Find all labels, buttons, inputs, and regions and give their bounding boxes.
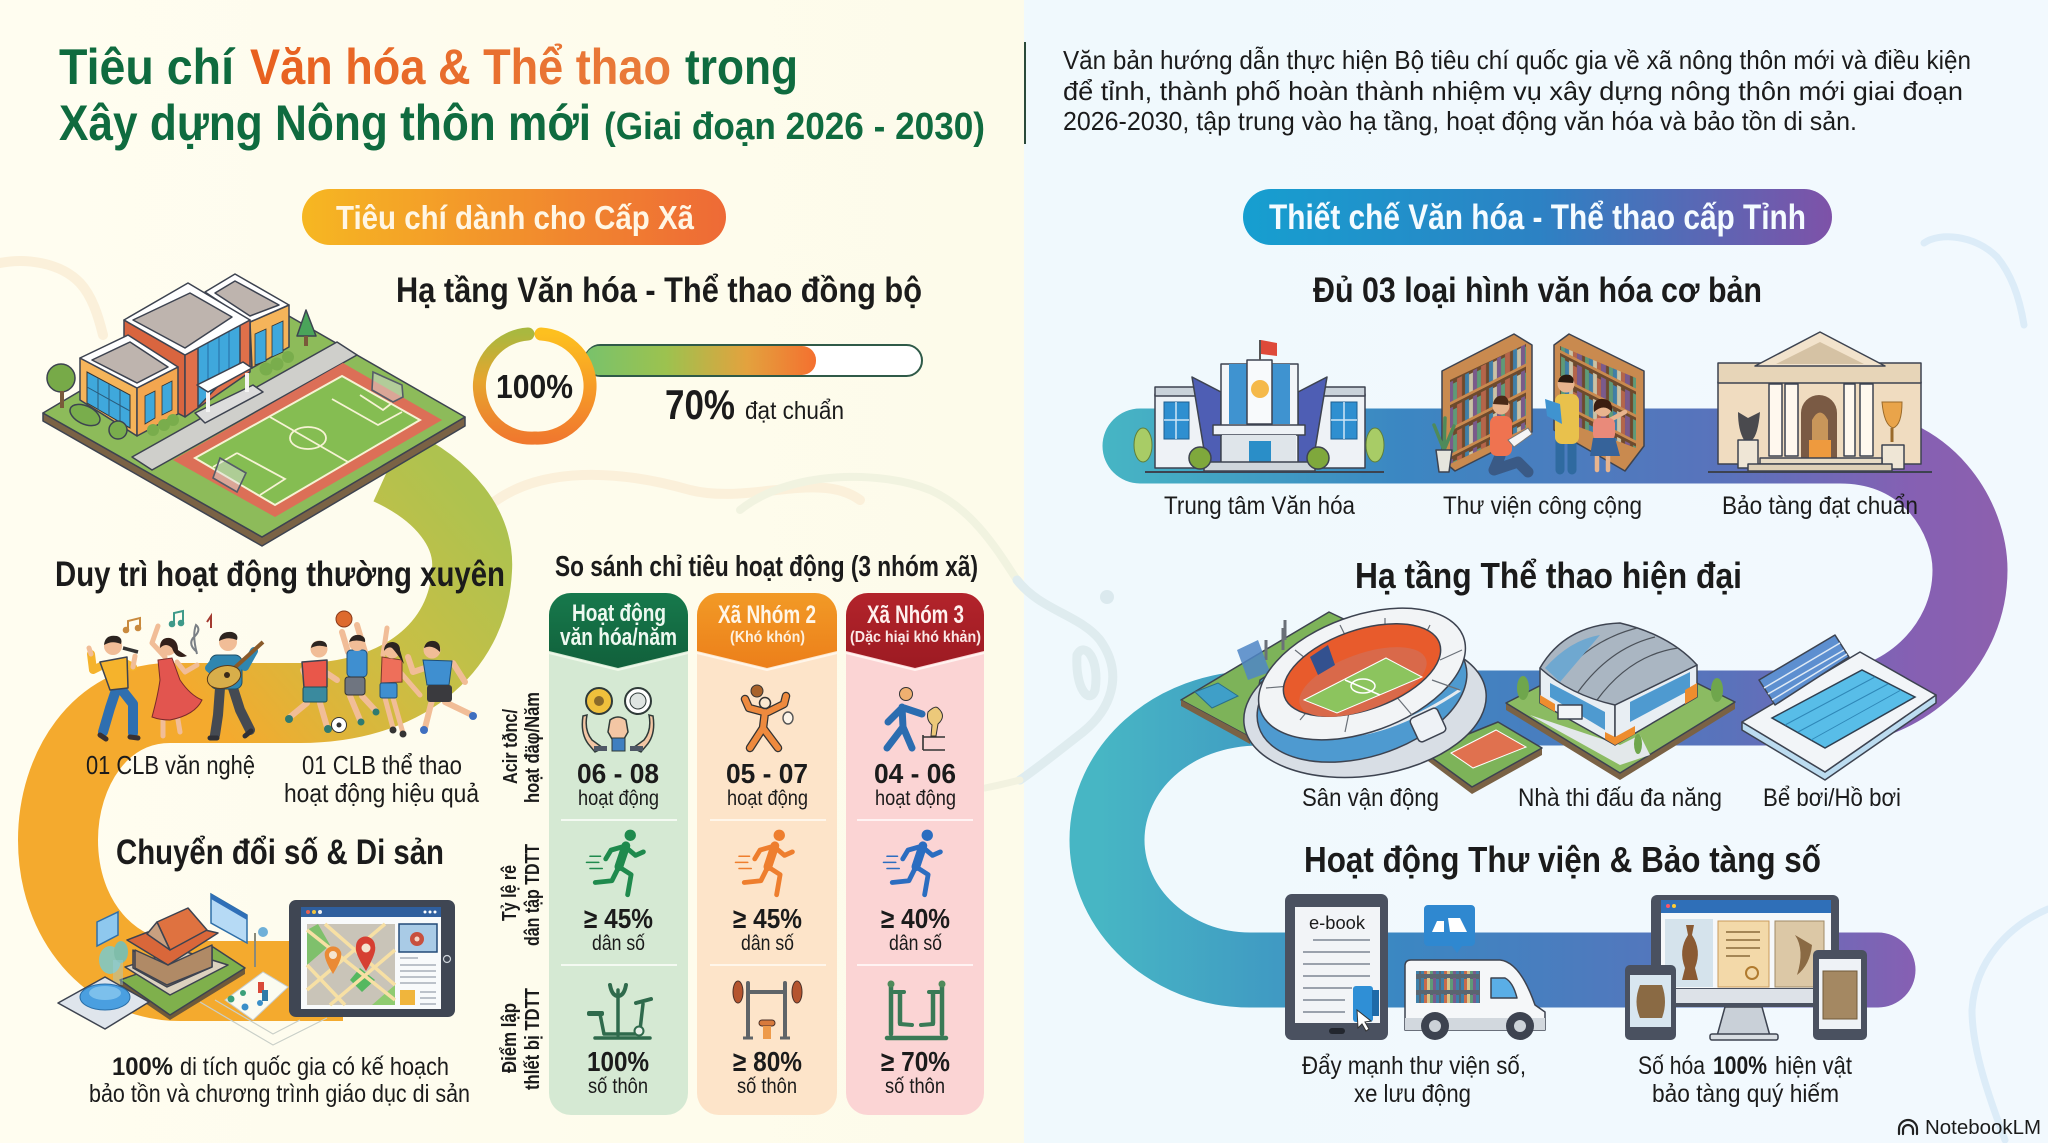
decorative dot <box>1100 590 1114 604</box>
guitarist <box>205 632 263 738</box>
label: sports club: 01 CLB thể thao <box>302 750 462 780</box>
player: coral shirt <box>380 628 420 738</box>
table column: group 1: 100% <box>587 1046 649 1077</box>
background: right panel <box>1024 0 2048 1143</box>
floating screens <box>97 894 247 946</box>
reader standing <box>1545 375 1579 470</box>
illustration: tablet with map <box>289 900 455 1017</box>
background: left panel <box>0 0 1024 1143</box>
right bookshelf <box>1554 334 1644 471</box>
table column: group 3: 04 - 06 <box>874 758 956 789</box>
heading: digital library and museum: Hoạt động Thư viện & Bảo tàng số <box>1304 839 1821 880</box>
label: digitised artefacts <box>1638 1052 1852 1108</box>
temple plate <box>120 947 245 1020</box>
illustration: swimming pool <box>1742 635 1936 780</box>
label: sports hall: Nhà thi đấu đa năng <box>1518 784 1722 812</box>
trees and bushes <box>47 310 316 439</box>
stat: 70% standard <box>665 381 844 428</box>
illustration: e-book tablet: e-book <box>1309 913 1366 933</box>
table column: group 2: Xã Nhóm 2 <box>718 601 816 629</box>
phone left <box>1625 965 1676 1040</box>
table column: group 2: số thôn <box>737 1075 797 1098</box>
label: museum: Bảo tàng đạt chuẩn <box>1722 492 1918 520</box>
dancer <box>152 626 202 736</box>
table column: group 2: ≥ 80% <box>733 1046 802 1077</box>
label: music club: 01 CLB văn nghệ <box>86 750 255 780</box>
temple <box>127 908 218 987</box>
progress bar: 70% <box>585 345 922 376</box>
table column: group 1: 06 - 08 <box>577 758 659 789</box>
logo: NotebookLM: NotebookLM <box>1925 1117 2041 1139</box>
table column: group 2: 05 - 07 <box>726 758 808 789</box>
map tile <box>225 972 288 1020</box>
label: public library: Thư viện công cộng <box>1443 492 1642 520</box>
intro text block: để tỉnh, thành phố hoàn thành nhiệm vụ xây dựng nông thôn mới giai đoạn <box>1063 76 1963 106</box>
table column: group 1: văn hóa/năm <box>560 624 677 651</box>
row labels: hoạt đäφ/Năm <box>522 692 544 803</box>
table column: group 3 <box>846 593 984 1115</box>
table column: group 2 <box>697 593 837 1115</box>
icon: hands with medals <box>582 688 654 752</box>
illustration: sports club <box>285 611 477 738</box>
heading: digital transformation and heritage: Chuyển đổi số & Di sản <box>116 833 444 872</box>
stat: 70% standard: đạt chuẩn <box>745 397 844 425</box>
vase left <box>1738 412 1760 468</box>
table column: group 2: hoạt động <box>727 787 808 810</box>
table column: group 1: ≥ 45% <box>584 903 653 934</box>
heading: synchronous infrastructure: Hạ tầng Văn hóa - Thể thao đồng bộ <box>396 271 922 310</box>
music notes <box>124 611 211 654</box>
text: heritage conservation: 100% <box>112 1053 173 1081</box>
pill heading: commune level: Tiêu chí dành cho Cấp Xã <box>336 199 695 236</box>
label: digitised artefacts: 100% <box>1713 1052 1767 1080</box>
table column: group 3: dân số <box>889 932 942 955</box>
digital disc plate <box>58 977 149 1029</box>
map <box>307 924 395 1005</box>
stat: 70% standard: 70% <box>665 381 735 428</box>
progress: 100% donut <box>479 334 922 438</box>
pill heading: province level: Thiết chế Văn hóa - Thể thao cấp Tỉnh <box>1269 198 1806 237</box>
label: digitised artefacts: bảo tàng quý hiếm <box>1652 1080 1839 1108</box>
title: trong <box>685 39 798 95</box>
intro text block <box>1063 45 1971 136</box>
pale trees <box>99 941 128 985</box>
heading: comparison table: So sánh chỉ tiêu hoạt động (3 nhóm xã) <box>555 551 978 583</box>
label: digitised artefacts: Số hóa <box>1638 1052 1705 1080</box>
table column: group 3: (Dặc hiại khó khản) <box>850 629 981 646</box>
label: sports club: hoạt động hiệu quả <box>284 778 479 808</box>
title: (Giai đoạn 2026 - 2030) <box>604 106 985 148</box>
label: stadium: Sân vận động <box>1302 784 1439 812</box>
row labels <box>499 692 544 1090</box>
icon: outdoor walker <box>887 980 946 1038</box>
reader girl <box>1590 399 1625 470</box>
phone right <box>1813 950 1867 1040</box>
table column: group 2: dân số <box>741 932 794 955</box>
illustration: e-book tablet <box>1285 894 1388 1040</box>
title <box>59 39 985 151</box>
icon: person with trophy <box>887 688 945 750</box>
heading: three basic culture types: Đủ 03 loại hình văn hóa cơ bản <box>1313 271 1762 310</box>
intro text block: Văn bản hướng dẫn thực hiện Bộ tiêu chí quốc gia về xã nông thôn mới và điều kiện <box>1063 45 1971 75</box>
label: digital library: xe lưu động <box>1354 1080 1471 1108</box>
illustration: music club <box>89 611 263 739</box>
row labels: Điểm lập <box>499 1003 521 1073</box>
player: red shirt <box>285 640 337 733</box>
text: heritage conservation <box>89 1053 470 1108</box>
table column: group 3: hoạt động <box>875 787 956 810</box>
illustration: stadium <box>1181 583 1542 794</box>
pill heading: commune level <box>302 189 726 245</box>
table column: group 2: (Khó khón) <box>730 629 805 646</box>
illustration: school and football field <box>43 274 465 546</box>
soccer ball <box>332 718 346 732</box>
ribbon path: left <box>58 465 472 981</box>
back block <box>205 274 289 370</box>
intro text block: 2026-2030, tập trung vào hạ tầng, hoạt động văn hóa và bảo tồn di sản. <box>1063 106 1857 136</box>
title: Xây dựng Nông thôn mới <box>59 95 591 151</box>
reader seated <box>1490 396 1532 472</box>
label: digital library: Đẩy mạnh thư viện số, <box>1302 1052 1526 1080</box>
ribbon path: right <box>1107 446 1970 970</box>
illustration: digital museum devices <box>1625 895 1867 1040</box>
icon: blue runner <box>884 830 940 895</box>
label: culture centre: Trung tâm Văn hóa <box>1164 492 1355 520</box>
table column: group 1: hoạt động <box>578 787 659 810</box>
left block <box>80 335 178 436</box>
icon: barbell <box>733 981 802 1039</box>
icon: speech bubble with truck <box>1424 905 1475 953</box>
icon: orange dancer with ball <box>745 685 793 748</box>
illustration: digital temple <box>58 894 327 1045</box>
progress: 100% donut: 100% <box>496 368 573 405</box>
table column: group 2: ≥ 45% <box>733 903 802 934</box>
pill heading: province level <box>1243 189 1832 245</box>
entrance canopy <box>195 362 263 423</box>
player: blue shirt with ball <box>336 611 380 726</box>
table column: group 3: ≥ 40% <box>881 903 950 934</box>
row labels: dân tập TDTT <box>522 844 544 946</box>
plant <box>1434 418 1454 472</box>
illustration: mobile library van <box>1405 960 1545 1040</box>
table column: group 1: dân số <box>592 932 645 955</box>
illustration: museum <box>1708 332 1932 472</box>
label: swimming pool: Bể bơi/Hồ bơi <box>1763 784 1901 812</box>
row labels: thlết bị TDTT <box>522 988 544 1090</box>
flag post <box>255 927 268 967</box>
label: digital library <box>1302 1052 1526 1108</box>
illustration: culture centre <box>1134 340 1384 472</box>
table column: group 3: số thôn <box>885 1075 945 1098</box>
heading: modern sports infrastructure: Hạ tầng Thể thao hiện đại <box>1355 555 1742 596</box>
table column: group 3: ≥ 70% <box>881 1046 950 1077</box>
icon: exercise bike <box>587 985 651 1038</box>
singer <box>89 636 138 739</box>
left bookshelf <box>1442 334 1532 471</box>
basketball court plate <box>1424 722 1542 794</box>
table column: group 1: Hoạt động <box>572 600 666 627</box>
label: sports club <box>284 750 479 808</box>
trophy right <box>1882 402 1904 469</box>
row labels: Tỷ lệ rê <box>499 865 521 921</box>
central block <box>124 283 250 417</box>
title: Tiêu chí <box>59 39 236 95</box>
table column: group 1: số thôn <box>588 1075 648 1098</box>
row labels: Acir tðnc/ <box>500 709 522 784</box>
table column: group 3: Xã Nhóm 3 <box>867 601 964 629</box>
text: heritage conservation: bảo tồn và chương trình giáo dục di sản <box>89 1080 470 1108</box>
heading: regular activities: Duy trì hoạt động thường xuyên <box>55 555 505 594</box>
monitor <box>1651 895 1839 1040</box>
illustration: public library <box>1434 334 1644 472</box>
label: digitised artefacts: hiện vật <box>1775 1052 1852 1080</box>
illustration: sports hall <box>1506 623 1735 780</box>
text: heritage conservation: di tích quốc gia có kế hoạch <box>180 1053 449 1081</box>
icon: orange runner <box>736 830 792 895</box>
icon: green runner <box>586 830 643 895</box>
table column: group 1 <box>549 593 688 1115</box>
title: Văn hóa & Thể thao <box>250 39 671 95</box>
player: blue shirt running <box>408 641 477 734</box>
